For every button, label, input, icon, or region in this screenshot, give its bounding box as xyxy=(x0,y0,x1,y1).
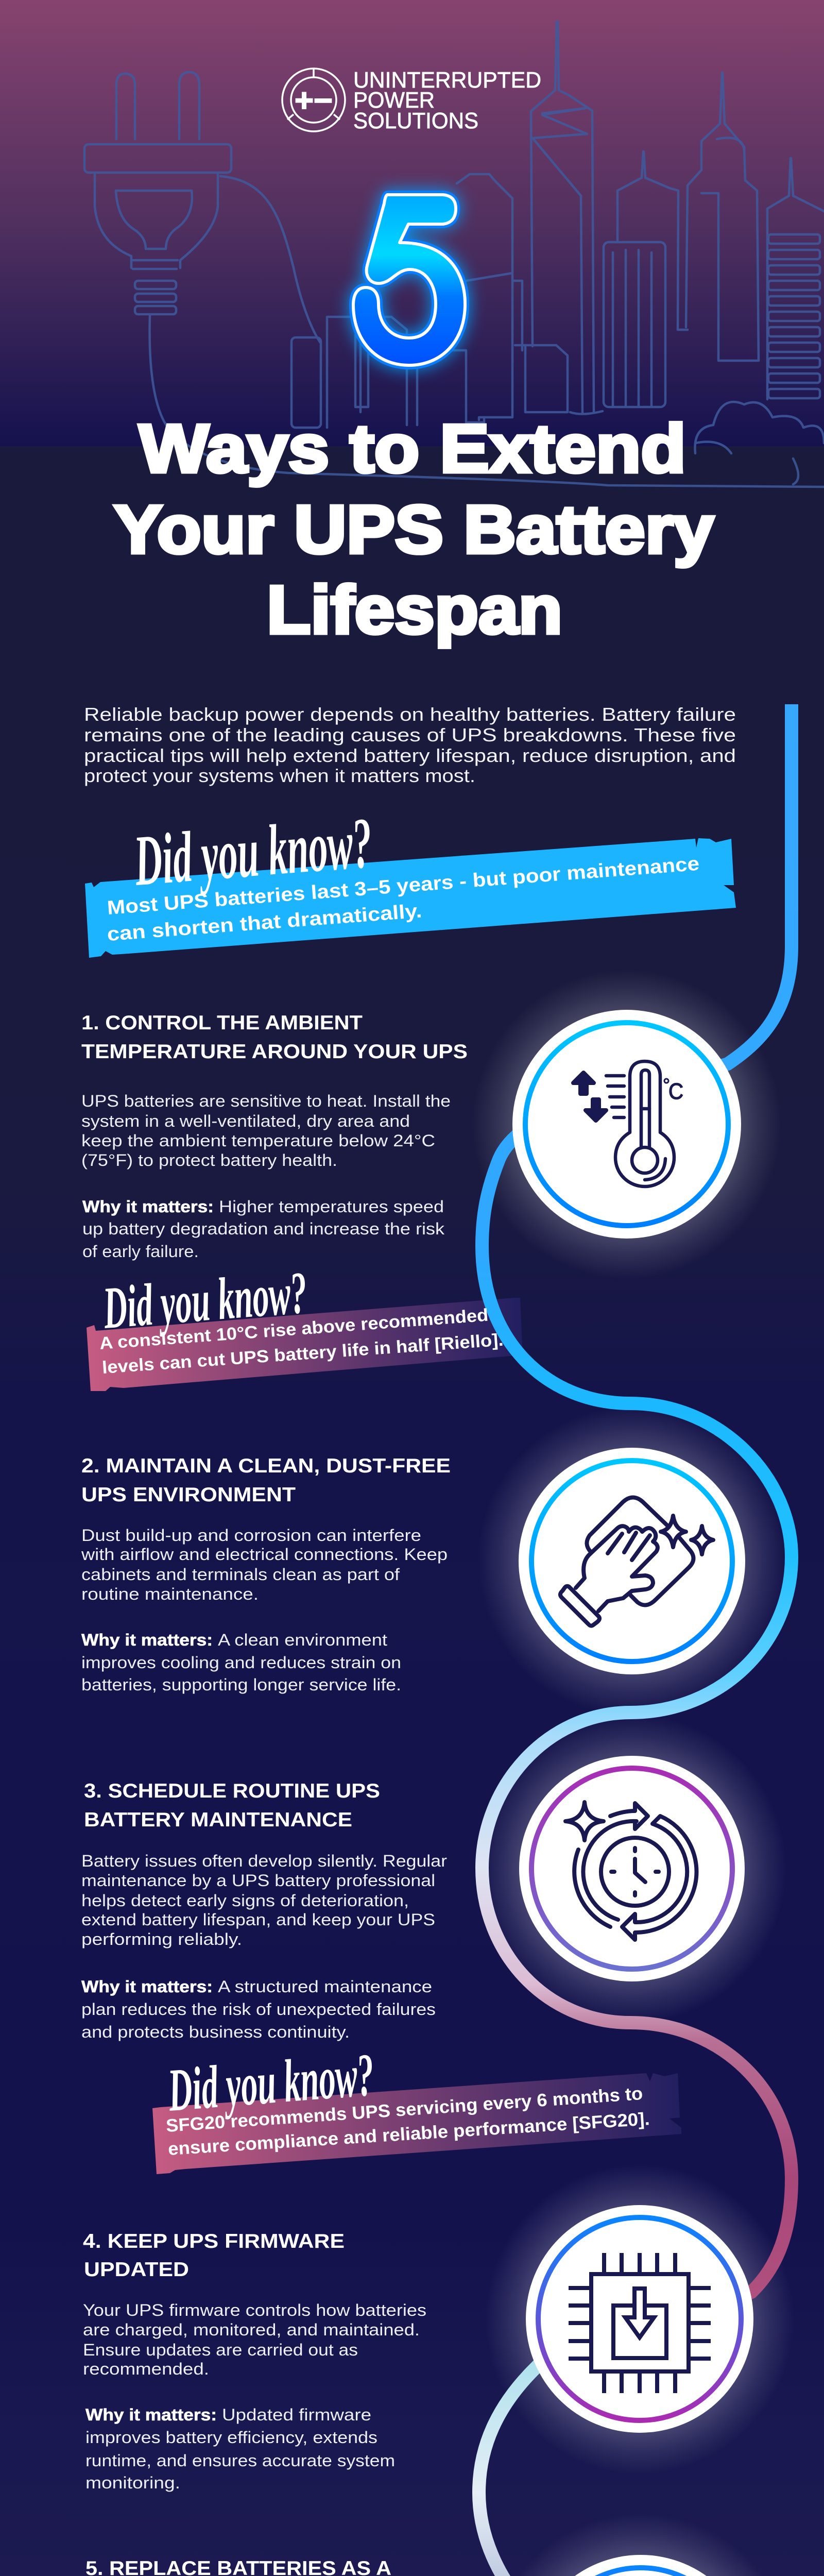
icon badge: hand wiping xyxy=(519,1448,745,1674)
heading: UPDATED xyxy=(84,2259,189,2281)
body text: are charged, monitored, and maintained. xyxy=(83,2320,420,2339)
logo wordmark: UNINTERRUPTED xyxy=(353,67,541,93)
section 2: clean environment xyxy=(81,1455,451,1694)
intro text xyxy=(84,704,736,786)
heading xyxy=(84,1780,380,1831)
why it matters: Higher temperatures speed xyxy=(219,1197,444,1216)
temperature arrows xyxy=(573,1073,606,1121)
why it matters: Why it matters: xyxy=(82,1197,214,1216)
heading xyxy=(81,1012,468,1063)
why it matters: runtime, and ensures accurate system xyxy=(85,2451,395,2470)
callout 1 ribbon shape xyxy=(85,838,736,958)
logo wordmark xyxy=(353,67,541,133)
body text: cabinets and terminals clean as part of xyxy=(81,1565,400,1584)
callout text: ensure compliance and reliable performance [SFG20]. xyxy=(167,2109,650,2159)
body text xyxy=(81,1852,447,1948)
why it matters: plan reduces the risk of unexpected failures xyxy=(81,2000,436,2019)
heading: TEMPERATURE AROUND YOUR UPS xyxy=(81,1041,468,1063)
icon badge: battery replace xyxy=(527,2555,754,2576)
intro text: remains one of the leading causes of UPS breakdowns. These five xyxy=(84,724,736,745)
callout text: can shorten that dramatically. xyxy=(106,900,423,945)
logo mark xyxy=(282,69,345,131)
callout 2 ribbon shape xyxy=(87,1298,523,1391)
callout text xyxy=(99,1306,504,1378)
body text: maintenance by a UPS battery professional xyxy=(81,1871,435,1890)
why it matters xyxy=(81,1631,401,1694)
callout 3 xyxy=(165,2041,650,2159)
heading: 1. CONTROL THE AMBIENT xyxy=(81,1012,363,1034)
icon badge: clock with cycle arrows xyxy=(519,1756,745,1981)
body text: Dust build-up and corrosion can interfere xyxy=(81,1526,421,1545)
body text: helps detect early signs of deterioration, xyxy=(81,1891,409,1910)
callout 2 xyxy=(99,1260,504,1378)
why it matters: Why it matters: xyxy=(81,1631,213,1649)
intro text: protect your systems when it matters most. xyxy=(84,765,475,786)
icon badge: thermometer xyxy=(512,1010,741,1239)
why it matters: A structured maintenance xyxy=(218,1977,432,1996)
why it matters: Updated firmware xyxy=(222,2405,371,2424)
body text: UPS batteries are sensitive to heat. Install the xyxy=(81,1092,451,1110)
icon badge: firmware chip xyxy=(526,2205,753,2433)
why it matters: and protects business continuity. xyxy=(81,2023,350,2041)
did you know heading: Did you know? xyxy=(165,2041,376,2124)
body text: system in a well-ventilated, dry area and xyxy=(81,1112,410,1130)
heading xyxy=(81,1455,451,1506)
section 4: firmware xyxy=(83,2230,426,2492)
icon: neon number 5 xyxy=(353,195,465,365)
did you know heading: Did you know? xyxy=(131,803,375,901)
why it matters xyxy=(85,2405,395,2492)
why it matters: A clean environment xyxy=(218,1631,387,1649)
background: header gradient xyxy=(0,0,824,446)
heading: UPS ENVIRONMENT xyxy=(81,1484,296,1506)
why it matters: up battery degradation and increase the risk xyxy=(82,1219,445,1238)
body text: performing reliably. xyxy=(81,1930,242,1948)
body text: with airflow and electrical connections. Keep xyxy=(81,1545,448,1564)
heading: 3. SCHEDULE ROUTINE UPS xyxy=(84,1780,380,1802)
why it matters xyxy=(82,1197,445,1261)
body text: Your UPS firmware controls how batteries xyxy=(83,2301,426,2319)
winding connector path xyxy=(479,704,792,2576)
callout 1 xyxy=(105,803,702,945)
section 3: routine maintenance xyxy=(81,1780,447,2041)
title: Your UPS Battery xyxy=(114,492,714,567)
circle glows xyxy=(472,970,795,2576)
body text: keep the ambient temperature below 24°C xyxy=(81,1131,435,1150)
logo wordmark: SOLUTIONS xyxy=(353,108,478,133)
why it matters: monitoring. xyxy=(85,2473,180,2492)
body text xyxy=(81,1092,451,1170)
callout text: Most UPS batteries last 3–5 years - but poor maintenance xyxy=(107,853,700,919)
body text: (75°F) to protect battery health. xyxy=(81,1151,337,1170)
celsius unit: C xyxy=(668,1079,683,1104)
body text: Ensure updates are carried out as xyxy=(83,2341,358,2359)
body text xyxy=(81,1526,448,1603)
why it matters xyxy=(81,1977,436,2041)
body text: recommended. xyxy=(83,2360,209,2378)
why it matters: batteries, supporting longer service life. xyxy=(81,1675,401,1694)
logo wordmark: POWER xyxy=(353,88,435,113)
why it matters: improves cooling and reduces strain on xyxy=(81,1653,401,1672)
intro text: Reliable backup power depends on healthy batteries. Battery failure xyxy=(84,704,736,725)
heading: BATTERY MAINTENANCE xyxy=(84,1809,352,1831)
title: Ways to Extend xyxy=(139,411,686,486)
section 1: control temperature xyxy=(81,1012,468,1261)
body text: routine maintenance. xyxy=(81,1585,259,1603)
brand logo xyxy=(282,67,541,133)
callout text: levels can cut UPS battery life in half [Riello]. xyxy=(101,1330,504,1378)
heading: 2. MAINTAIN A CLEAN, DUST-FREE xyxy=(81,1455,451,1477)
intro text: practical tips will help extend battery lifespan, reduce disruption, and xyxy=(84,745,736,766)
why it matters: Why it matters: xyxy=(81,1977,213,1996)
body text xyxy=(83,2301,426,2378)
callout text xyxy=(105,853,702,945)
callout text: SFG20 recommends UPS servicing every 6 months to xyxy=(165,2083,643,2136)
title: Lifespan xyxy=(267,572,562,648)
callout text xyxy=(165,2083,650,2159)
callout 3 ribbon shape xyxy=(152,2073,681,2174)
body text: Battery issues often develop silently. Regular xyxy=(81,1852,447,1870)
body text: extend battery lifespan, and keep your UPS xyxy=(81,1910,435,1929)
skyline and plug line art xyxy=(84,22,824,487)
title xyxy=(114,411,714,648)
why it matters: of early failure. xyxy=(82,1242,199,1261)
why it matters: improves battery efficiency, extends xyxy=(85,2428,377,2447)
heading xyxy=(83,2230,345,2281)
did you know heading: Did you know? xyxy=(100,1260,310,1342)
why it matters: Why it matters: xyxy=(85,2405,217,2424)
logo mark: +− xyxy=(295,83,333,118)
callout text: A consistent 10°C rise above recommended xyxy=(99,1306,489,1353)
heading: 4. KEEP UPS FIRMWARE xyxy=(83,2230,345,2252)
